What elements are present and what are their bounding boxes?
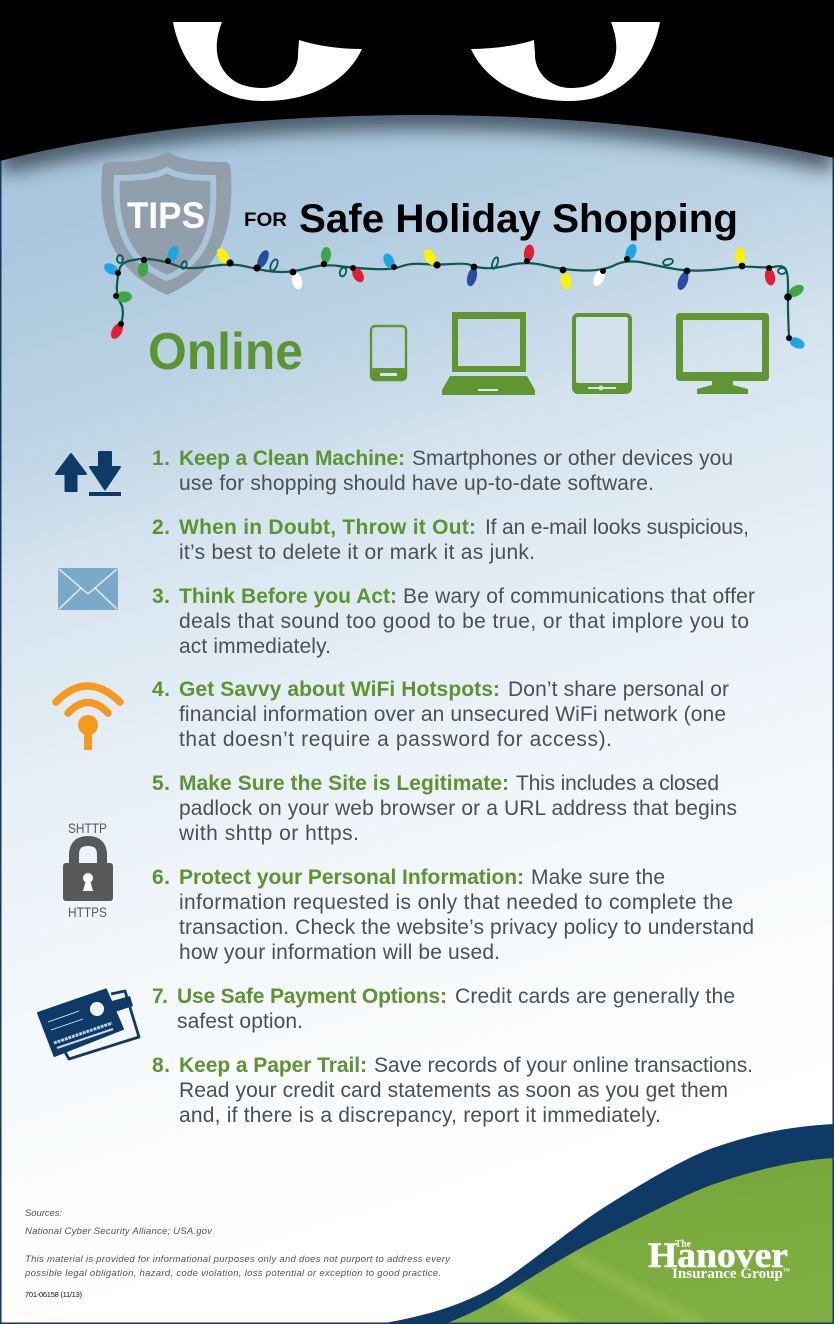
green wave bbox=[445, 1158, 834, 1324]
tip 6: how your information will be used. bbox=[179, 941, 500, 964]
tip 2 bbox=[152, 516, 749, 564]
string of holiday lights bbox=[102, 242, 806, 351]
tip 5: 5. bbox=[152, 772, 170, 795]
icon: credit cards bbox=[38, 990, 139, 1059]
tip 7: Use Safe Payment Options: bbox=[177, 985, 447, 1008]
tip 4: Don’t share personal or bbox=[508, 678, 729, 701]
shield with TIPS bbox=[101, 151, 231, 295]
tip 7: safest option. bbox=[177, 1010, 303, 1033]
tip 3: act immediately. bbox=[179, 635, 331, 658]
tip 1: 1. bbox=[152, 447, 170, 470]
tip 6: Make sure the bbox=[531, 866, 665, 889]
tip 7: 7. bbox=[152, 985, 168, 1008]
tip 2: When in Doubt, Throw it Out: bbox=[179, 516, 476, 539]
tip 8: Read your credit card statements as soon as you get them bbox=[179, 1079, 728, 1102]
tip 8: Save records of your online transactions. bbox=[374, 1054, 753, 1077]
shield with TIPS: TIPS bbox=[127, 195, 205, 236]
tip 8 bbox=[152, 1054, 753, 1127]
tip 5 bbox=[152, 772, 737, 845]
tip 4: financial information over an unsecured WiFi network (one bbox=[179, 703, 726, 726]
icon: padlock with SHTTP and HTTPS bbox=[63, 821, 113, 920]
tip 5: Make Sure the Site is Legitimate: bbox=[179, 772, 509, 795]
tip 6: information requested is only that needed to complete the bbox=[179, 891, 733, 914]
arc shadow below black header bbox=[0, 115, 834, 161]
tip list bbox=[152, 447, 755, 1127]
tip 3 bbox=[152, 585, 755, 658]
icon: padlock with SHTTP and HTTPS: SHTTP bbox=[68, 821, 107, 836]
icon: update arrows bbox=[56, 452, 121, 496]
tip 1: use for shopping should have up-to-date software. bbox=[179, 472, 654, 495]
black header with arc edge bbox=[0, 0, 834, 161]
tip 2: If an e-mail looks suspicious, bbox=[485, 516, 749, 539]
icon: desktop monitor bbox=[676, 313, 769, 394]
tip 2: it’s best to delete it or mark it as junk. bbox=[179, 541, 535, 564]
tip 7: Credit cards are generally the bbox=[455, 985, 735, 1008]
icon: padlock with SHTTP and HTTPS: HTTPS bbox=[68, 905, 107, 920]
icon: smartphone bbox=[371, 326, 406, 380]
tip 1 bbox=[152, 447, 733, 495]
icon: tablet bbox=[572, 313, 632, 394]
sources and disclaimer bbox=[24, 1208, 451, 1299]
tip 8: and, if there is a discrepancy, report it immediately. bbox=[179, 1104, 661, 1127]
green wave light streaks bbox=[500, 1256, 705, 1324]
icon: laptop bbox=[442, 312, 535, 395]
logo: The Hanover Insurance Group: ™ bbox=[783, 1267, 790, 1275]
navy wave bbox=[378, 1124, 834, 1324]
tip 5: This includes a closed bbox=[516, 772, 719, 795]
right eye bbox=[471, 22, 660, 101]
tip 4: 4. bbox=[152, 678, 170, 701]
tip 6 bbox=[152, 866, 754, 964]
tip 5: with shttp or https. bbox=[178, 822, 359, 845]
tip 3: Be wary of communications that offer bbox=[403, 585, 755, 608]
tip 6: 6. bbox=[152, 866, 170, 889]
title: for safe holiday shopping: Safe Holiday Shopping bbox=[299, 197, 738, 241]
tip 6: Protect your Personal Information: bbox=[179, 866, 524, 889]
icon: wifi signal bbox=[56, 686, 120, 750]
heading: Online: Online bbox=[148, 323, 303, 381]
sources and disclaimer: 701-06158 (11/13) bbox=[25, 1290, 82, 1299]
tip 8: Keep a Paper Trail: bbox=[179, 1054, 367, 1077]
tip 5: padlock on your web browser or a URL address that begins bbox=[179, 797, 737, 820]
sources and disclaimer: National Cyber Security Alliance; USA.gov bbox=[25, 1226, 213, 1237]
tip 3: deals that sound too good to be true, or that implore you to bbox=[179, 610, 749, 633]
tip 6: transaction. Check the website’s privacy policy to understand bbox=[179, 916, 754, 939]
sources and disclaimer: This material is provided for informational purposes only and does not purport to address every bbox=[25, 1254, 451, 1265]
tip 3: Think Before you Act: bbox=[179, 585, 397, 608]
sources and disclaimer: possible legal obligation, hazard, code violation, loss potential or exception to good practice. bbox=[24, 1268, 441, 1279]
logo: The Hanover Insurance Group: Insurance Group bbox=[672, 1266, 782, 1282]
tip 2: 2. bbox=[152, 516, 170, 539]
tip 1: Smartphones or other devices you bbox=[412, 447, 733, 470]
tip 4: Get Savvy about WiFi Hotspots: bbox=[179, 678, 500, 701]
left eye bbox=[173, 22, 362, 101]
tip 3: 3. bbox=[152, 585, 170, 608]
tip 4: that doesn’t require a password for access). bbox=[179, 728, 612, 751]
tip 4 bbox=[152, 678, 729, 751]
tip 1: Keep a Clean Machine: bbox=[179, 447, 405, 470]
tip 7 bbox=[152, 985, 735, 1033]
logo: The Hanover Insurance Group: Hanover bbox=[648, 1235, 788, 1275]
sources and disclaimer: Sources: bbox=[25, 1208, 62, 1219]
title: for safe holiday shopping: FOR bbox=[244, 210, 287, 231]
logo: The Hanover Insurance Group: The bbox=[675, 1239, 692, 1250]
tip 8: 8. bbox=[152, 1054, 170, 1077]
icon: envelope bbox=[58, 568, 118, 610]
